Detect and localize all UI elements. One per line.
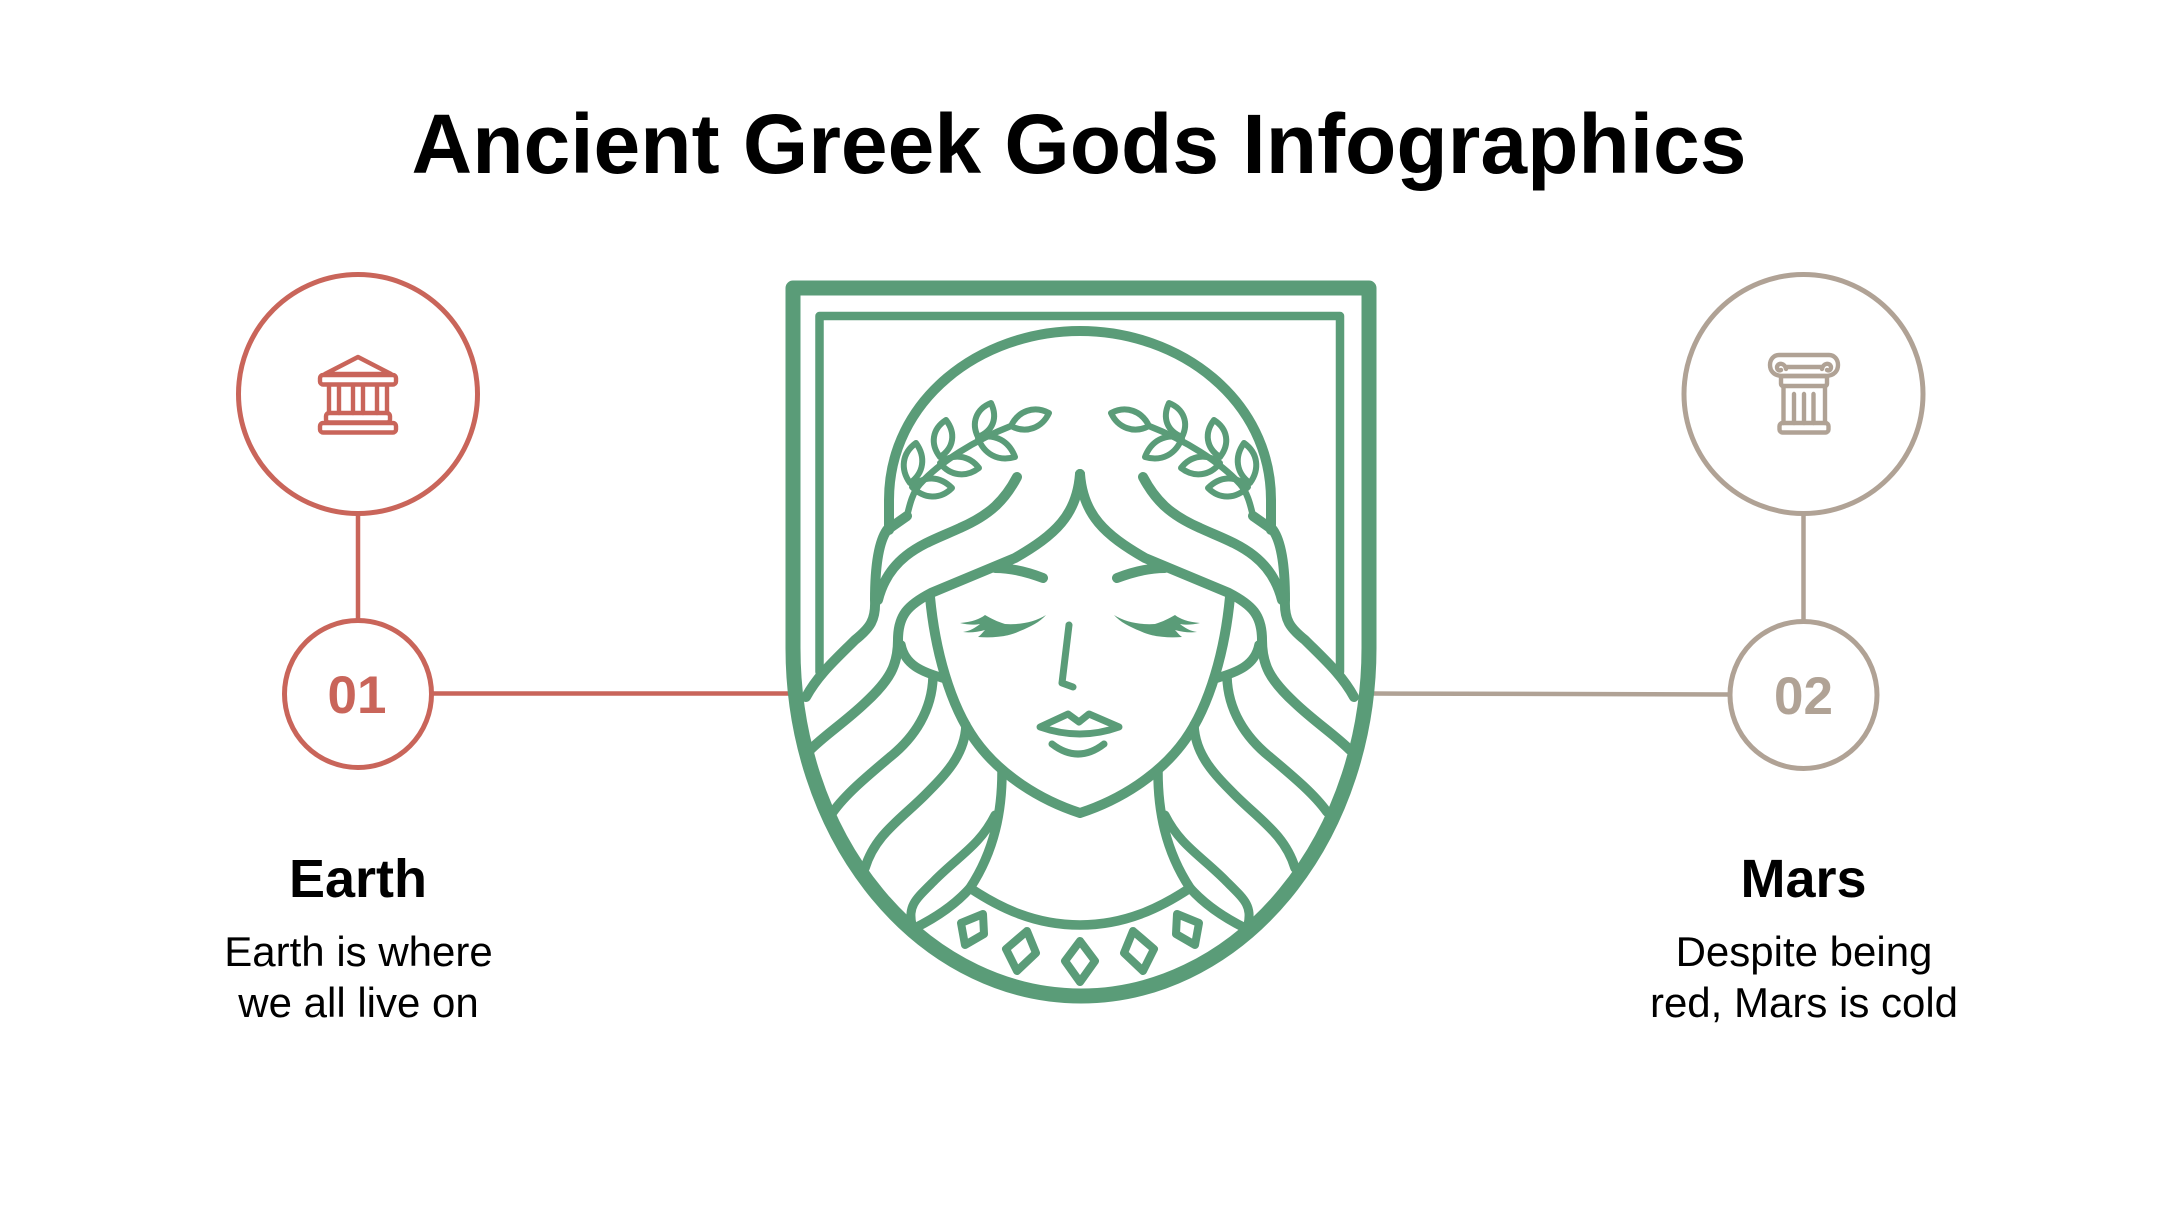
chin mark [1052,744,1104,754]
eyebrow [995,568,1043,578]
title: Ancient Greek Gods Infographics [412,97,1746,191]
inner frame [820,316,1340,672]
panel: Mars item [1370,274,1958,1026]
hair strand 3 [1194,725,1295,868]
ear [1217,645,1259,678]
crown wave [1143,477,1282,600]
outer hair [806,516,907,697]
head arch [889,331,1271,530]
description: Mars: Despite being [1676,928,1932,975]
description: Earth: we all live on [237,979,479,1026]
hair loop [911,815,995,925]
connector: icon circle to number circle [1801,514,1806,621]
hair strand 3 [865,725,966,868]
number circle 02 [1730,622,1877,768]
connector: number circle to emblem [433,691,790,696]
icon: ionic column [1770,355,1838,432]
lips [1040,714,1119,734]
icon circle [1684,274,1923,514]
centre necklace gem [1065,941,1095,982]
laurel branch [904,403,1049,516]
icon circle [238,274,478,514]
hair strand 2 [1227,677,1327,812]
connector: emblem to number circle [1370,694,1729,695]
heading: Earth: Earth [289,849,427,909]
left hair and laurel [806,403,1080,971]
necklace gems left [961,914,1036,971]
emblem: goddess shield [793,288,1369,996]
icon: greek temple [320,357,396,432]
crown wave [878,477,1017,600]
heading: Mars: Mars [1740,849,1867,909]
neck side [1158,772,1245,928]
description: Earth: Earth is where [224,928,493,975]
neckline [970,888,1190,925]
nose [1062,625,1073,687]
necklace gems right [1124,914,1199,971]
number 01: 01 [328,666,386,725]
eyebrow [1117,568,1165,578]
outer hair [1253,516,1354,697]
description: Mars: red, Mars is cold [1650,979,1958,1026]
number circle 01 [284,620,432,768]
parted hair [1080,474,1350,750]
number 02: 02 [1774,667,1833,726]
connector: icon circle to number circle [356,514,360,621]
hair loop [1165,815,1249,925]
right hair and laurel [1080,403,1354,971]
shield outline [793,288,1369,996]
panel: Earth item [224,274,790,1026]
closed eye [960,615,1046,637]
face outline [930,597,1230,813]
parted hair [810,474,1080,750]
ear [901,645,943,678]
closed eye [1114,615,1200,637]
laurel branch [1111,403,1256,516]
hair strand 2 [833,677,933,812]
neck side [915,772,1002,928]
